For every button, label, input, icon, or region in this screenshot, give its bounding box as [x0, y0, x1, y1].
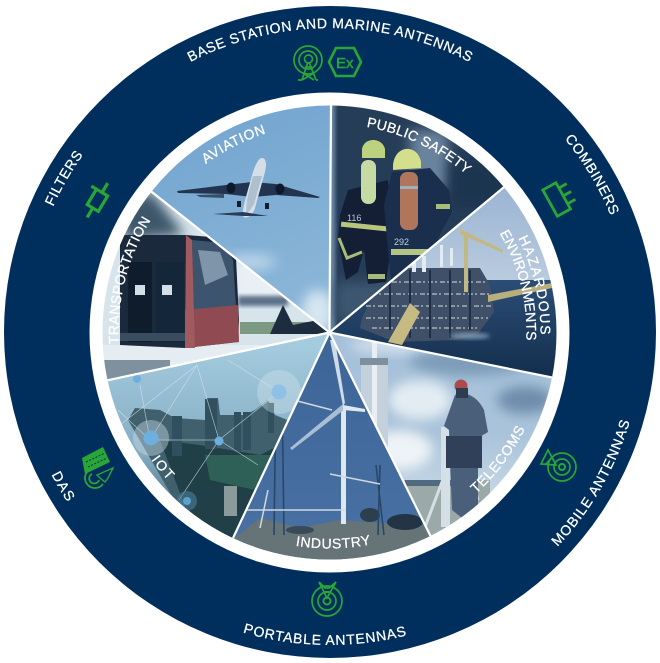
bus: [120, 235, 239, 348]
label: public safety: PUBLIC SAFETY: [367, 117, 472, 172]
panel: transportation: [102, 192, 327, 380]
power lines: [247, 400, 385, 536]
label: aviation: AVIATION: [203, 124, 265, 164]
photo wheel: [102, 106, 556, 560]
label: industry: INDUSTRY: [296, 534, 370, 549]
city towers: [172, 399, 274, 516]
wedge dividers: [108, 106, 552, 538]
panel: aviation: [152, 106, 330, 330]
panel: hazardous environments: [332, 188, 556, 378]
tower: [360, 342, 388, 448]
label: mobile antennas: MOBILE ANTENNAS: [551, 420, 629, 546]
label: das: DAS: [52, 470, 74, 501]
label: portable antennas: PORTABLE ANTENNAS: [244, 623, 406, 645]
label: iot: IOT: [152, 454, 176, 478]
label: hazardous: HAZARDOUS: [518, 235, 550, 334]
label: environments: ENVIRONMENTS: [500, 229, 536, 340]
label: combiners: COMBINERS: [566, 134, 618, 214]
label: base station and marine antennas: BASE STATION AND MARINE ANTENNAS: [187, 18, 472, 62]
wind turbine: [290, 340, 365, 524]
panel: telecoms: [332, 334, 552, 536]
label: filters: FILTERS: [44, 150, 82, 206]
panel: industry: [233, 335, 430, 560]
firefighter right: [384, 149, 452, 292]
offshore rig: [360, 229, 552, 345]
panel: iot: [108, 334, 328, 538]
icon: mobile antenna: [541, 450, 576, 481]
icon: filter: [76, 177, 113, 221]
icon: ex hexagon: Ex: [336, 55, 354, 72]
firefighter right: 292: [394, 237, 409, 247]
icon: base station tower: [294, 46, 322, 80]
airplane: [177, 158, 320, 218]
firefighter left: [338, 140, 392, 284]
worker: [425, 380, 488, 527]
network lines: [118, 360, 279, 500]
firefighter left: 116: [347, 213, 361, 223]
icon: das: [82, 447, 113, 488]
white inner ring: [90, 92, 570, 572]
icon: combiner: [543, 178, 578, 216]
icon: ex hexagon: [329, 48, 361, 76]
icon: portable antenna: [312, 582, 342, 616]
iot nodes: [133, 370, 301, 511]
label: transportation: TRANSPORTATION: [108, 216, 150, 344]
panel: public safety: [330, 106, 504, 330]
label: telecoms: TELECOMS: [470, 426, 524, 492]
